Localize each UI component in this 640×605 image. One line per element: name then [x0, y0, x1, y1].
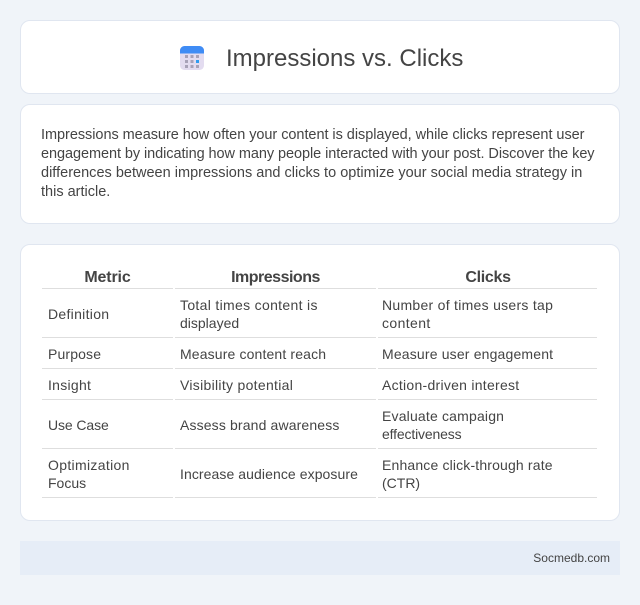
row: Optimization Focus: [48, 457, 553, 491]
row: Purpose: [48, 346, 553, 362]
row: Purpose: Purpose: [48, 346, 101, 362]
row: Insight: Action-driven interest: [382, 377, 519, 393]
footer text: Socmedb.com: [533, 551, 610, 565]
row: Optimization Focus: Optimization: [48, 457, 130, 473]
panel: introduction: [20, 104, 620, 224]
panel: title: [20, 20, 620, 94]
row: Definition: Total times content is: [180, 297, 318, 313]
row: Use Case: effectiveness: [382, 426, 462, 442]
footer bar: [20, 541, 620, 575]
table header: Metric: [84, 269, 131, 286]
panel: comparison table: [20, 244, 620, 521]
row: Use Case: [48, 408, 504, 442]
row: Optimization Focus: (CTR): [382, 475, 420, 491]
row: Definition: Definition: [48, 306, 109, 322]
row: Insight: Visibility potential: [180, 377, 293, 393]
row: Use Case: Evaluate campaign: [382, 408, 504, 424]
row: Purpose: Measure user engagement: [382, 346, 553, 362]
row: Definition: displayed: [180, 315, 239, 331]
icon: calendar: [180, 46, 204, 70]
heading: Impressions vs. Clicks: [226, 45, 463, 72]
text block: introduction: this article.: [41, 184, 110, 200]
row: Use Case: Assess brand awareness: [180, 417, 340, 433]
text block: introduction: differences between impressions and clicks to optimize your social media strategy in: [41, 165, 582, 181]
text block: introduction: Impressions measure how often your content is displayed, while clicks represent user: [41, 127, 584, 143]
table header: [84, 269, 511, 286]
text block: introduction: engagement by indicating how many people interacted with your post. Discover the key: [41, 146, 594, 162]
row: Definition: content: [382, 315, 431, 331]
row: Use Case: Use Case: [48, 417, 109, 433]
row: Definition: Number of times users tap: [382, 297, 553, 313]
row: Insight: Insight: [48, 377, 91, 393]
table header: Clicks: [465, 269, 511, 286]
row: Optimization Focus: Focus: [48, 475, 86, 491]
row: Insight: [48, 377, 520, 393]
text block: introduction: [41, 127, 594, 200]
row: Purpose: Measure content reach: [180, 346, 326, 362]
table header: Impressions: [231, 269, 320, 286]
row: Optimization Focus: Enhance click-through rate: [382, 457, 553, 473]
row: Definition: [48, 297, 553, 331]
row: Optimization Focus: Increase audience exposure: [180, 466, 358, 482]
